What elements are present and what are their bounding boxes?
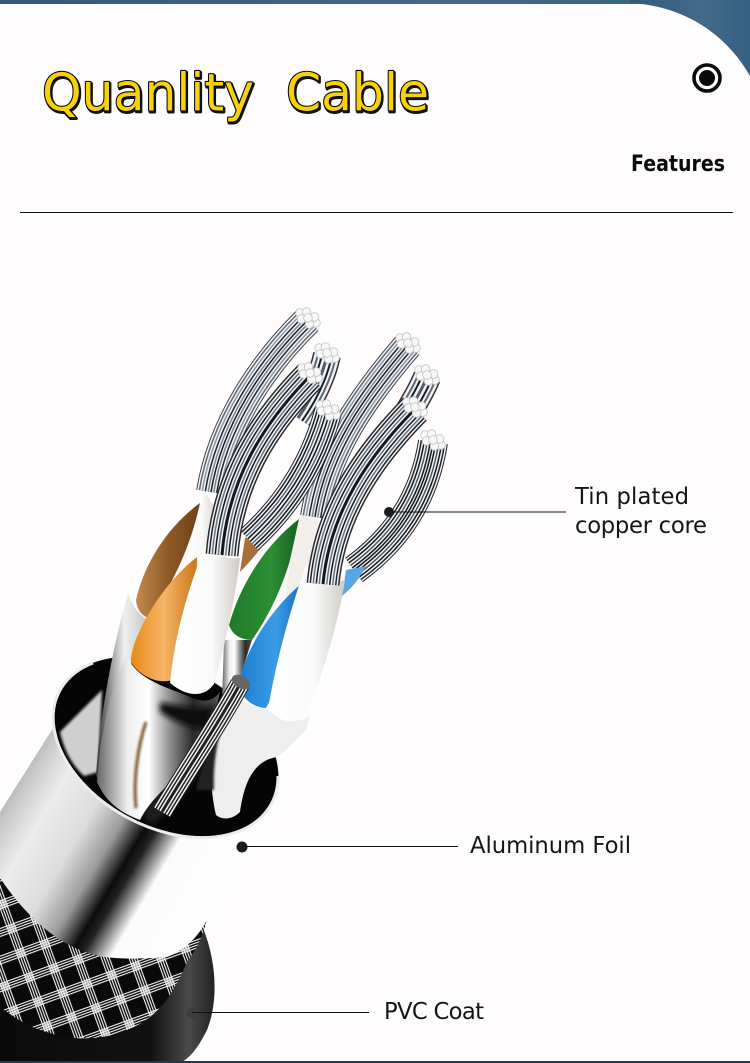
blue wire — [238, 584, 301, 708]
green wire — [229, 519, 299, 640]
callout: PVC coat: PVC Coat — [384, 999, 484, 1025]
silver tube for brown pair — [96, 593, 152, 790]
aluminum foil sleeve — [0, 725, 278, 959]
callout: tin plated copper core: Tin plated — [574, 484, 689, 510]
strand bundle 1 — [211, 320, 308, 492]
strand bundle 3 — [222, 376, 310, 555]
strand bundle 8 — [354, 442, 433, 570]
callout: tin plated copper core — [384, 484, 707, 539]
front white sheath right — [268, 565, 345, 722]
central drain strand — [162, 672, 253, 812]
small back strand left — [298, 355, 327, 418]
callout: aluminum foil: Aluminum Foil — [470, 833, 631, 859]
page header band — [0, 0, 750, 76]
back white sheaths — [170, 490, 322, 640]
braided shield — [0, 870, 207, 1038]
illustration: cable cross-section — [0, 308, 445, 1063]
strand bundle 7 — [323, 409, 415, 584]
orange wire — [131, 557, 197, 681]
PVC coat — [0, 928, 215, 1063]
strand tips — [296, 308, 445, 450]
foil rim — [53, 663, 278, 838]
features label: Features — [631, 152, 725, 177]
title: Quanlity Cable — [43, 65, 430, 125]
strand bundle 5 — [315, 345, 408, 517]
foil opening interior — [22, 620, 310, 874]
silver tube for blue pair — [211, 700, 310, 818]
callout: aluminum foil — [236, 833, 631, 859]
strand bundle 4 — [249, 412, 328, 540]
callout: PVC coat — [186, 999, 484, 1025]
callout: tin plated copper core: copper core — [575, 513, 707, 539]
front white sheath left — [170, 542, 240, 694]
title: Quanlity Cable — [42, 64, 429, 124]
blue wire accent — [342, 566, 366, 596]
small back strand right — [405, 377, 427, 418]
brown wire — [136, 503, 200, 618]
icon: target bullet — [694, 65, 720, 91]
interior reflections — [60, 690, 215, 825]
silver tube for orange pair — [97, 655, 220, 820]
